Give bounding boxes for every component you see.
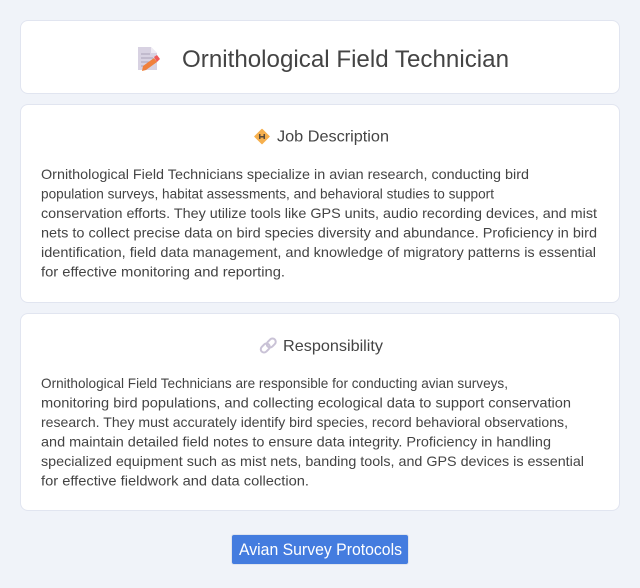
button: Avian Survey Protocols: Avian Survey Protocols (239, 541, 402, 559)
text block: job description body: population surveys, habitat assessments, and behavioral studies to support (41, 186, 494, 202)
icon: chain link (259, 337, 277, 354)
text block: responsibility body: specialized equipment such as mist nets, banding tools, and GPS devices is essential (41, 453, 584, 469)
text block: job description body: for effective monitoring and reporting. (41, 264, 285, 280)
text block: job description body: nets to collect precise data on bird species diversity and abundance. Proficiency in bird (41, 224, 597, 240)
text block: responsibility body: Ornithological Field Technicians are responsible for conducting avian surveys, (41, 375, 508, 391)
panel: responsibility (20, 313, 620, 511)
text block: responsibility body: for effective fieldwork and data collection. (41, 472, 309, 488)
text block: job description body: conservation efforts. They utilize tools like GPS units, audio recording devices, and mist (41, 205, 597, 221)
panel: job description (20, 104, 620, 303)
text block: responsibility body: monitoring bird populations, and collecting ecological data to support conservation (41, 394, 571, 410)
heading: job title: Ornithological Field Technician (182, 46, 509, 73)
text block: job description body (41, 166, 597, 280)
icon: document with pencil (138, 47, 160, 71)
icon: diamond road sign (255, 130, 269, 144)
heading: job description: Job Description (277, 128, 389, 146)
heading: responsibility: Responsibility (283, 338, 383, 355)
text block: responsibility body (41, 375, 584, 488)
text block: job description body: Ornithological Field Technicians specialize in avian research, conducting bird (41, 166, 529, 182)
text block: responsibility body: research. They must accurately identify bird species, record behavioral observations, (41, 414, 568, 430)
text block: job description body: identification, field data management, and knowledge of migratory patterns is essential (41, 244, 596, 260)
text block: responsibility body: and maintain detailed field notes to ensure data integrity. Proficiency in handling (41, 434, 551, 450)
panel: title (20, 20, 620, 94)
button: Avian Survey Protocols (231, 534, 409, 565)
